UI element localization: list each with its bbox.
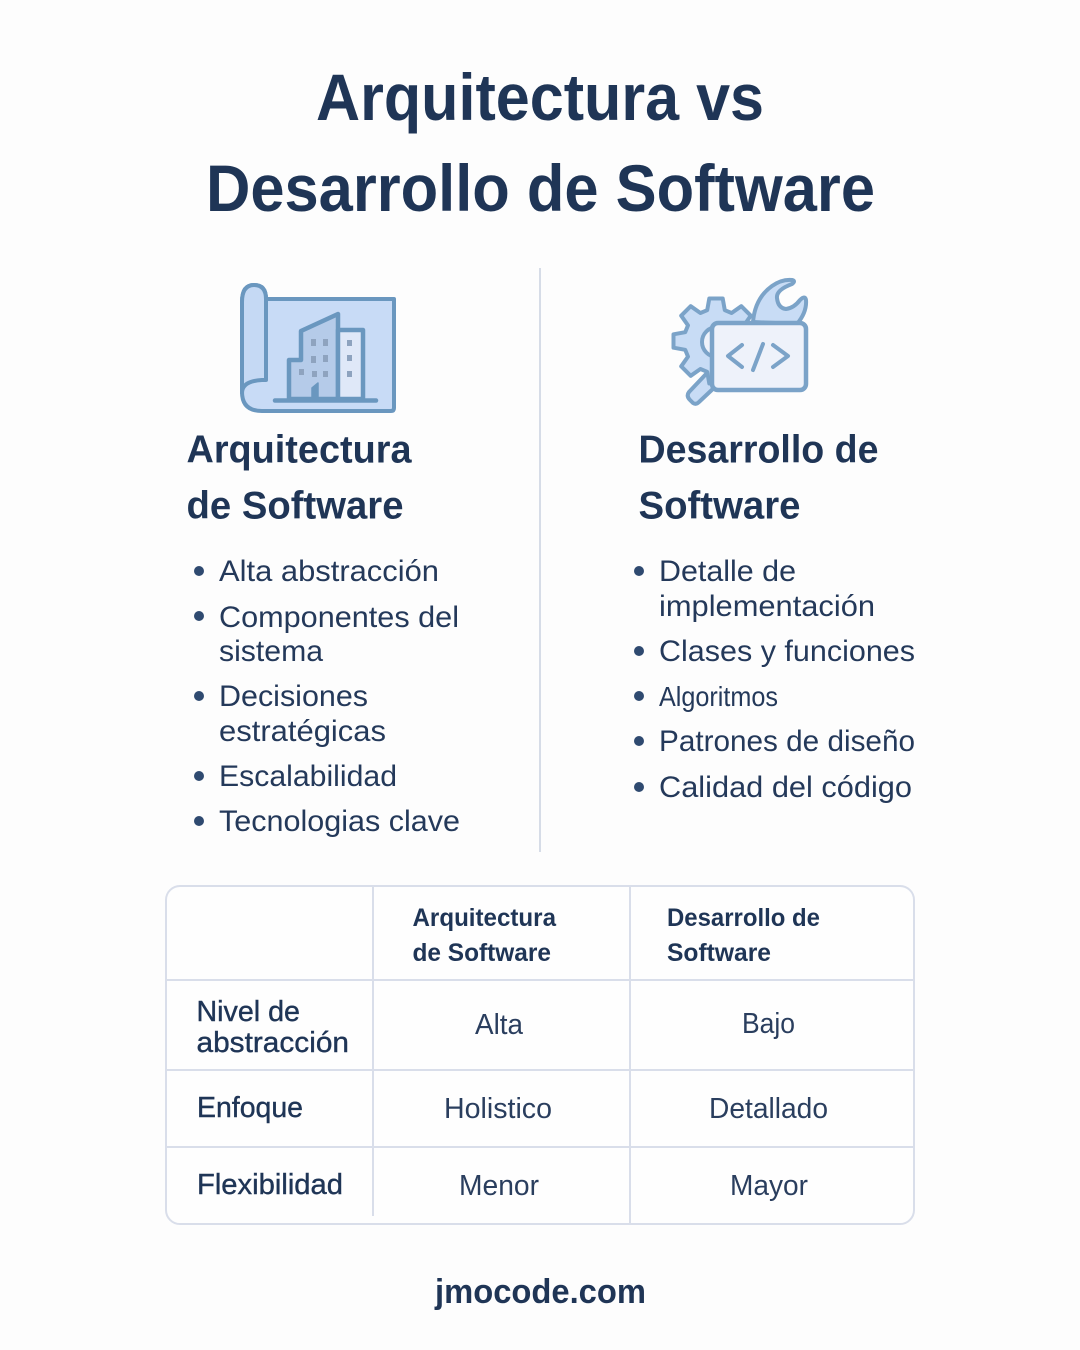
bullet list: arquitectura: Decisiones bbox=[219, 680, 368, 713]
row: nivel de abstracción bbox=[196, 996, 795, 1059]
bullet list: desarrollo: Patrones de diseño bbox=[659, 725, 915, 758]
bullet list: arquitectura: sistema bbox=[219, 635, 323, 668]
title bbox=[206, 60, 875, 225]
row: enfoque: Enfoque bbox=[197, 1092, 303, 1124]
title: Arquitectura vs bbox=[316, 60, 764, 134]
table header: de Software bbox=[412, 939, 551, 967]
heading: arquitectura de software bbox=[186, 428, 412, 528]
bullet list: desarrollo bbox=[634, 555, 915, 804]
row: nivel de abstracción: Alta bbox=[475, 1009, 523, 1041]
heading: desarrollo de software: Software bbox=[638, 484, 800, 528]
bullet list: arquitectura bbox=[194, 555, 460, 838]
panel: desarrollo de software bbox=[634, 280, 915, 804]
bullet list: desarrollo: Algoritmos bbox=[659, 681, 778, 712]
table header: Software bbox=[667, 939, 771, 967]
heading: desarrollo de software: Desarrollo de bbox=[638, 428, 878, 472]
footer: site name: jmocode.com bbox=[434, 1273, 646, 1311]
comparison table bbox=[166, 886, 914, 1224]
row: nivel de abstracción: Bajo bbox=[742, 1008, 795, 1040]
row: flexibilidad: Mayor bbox=[730, 1170, 808, 1202]
heading: desarrollo de software bbox=[638, 428, 878, 528]
row: enfoque bbox=[197, 1092, 828, 1125]
bullet list: arquitectura: Tecnologias clave bbox=[219, 805, 460, 838]
bullet list: desarrollo: Clases y funciones bbox=[659, 635, 915, 668]
icon: blueprint with building bbox=[242, 285, 394, 411]
row: enfoque: Detallado bbox=[709, 1093, 828, 1125]
bullet list: desarrollo: Detalle de bbox=[659, 555, 796, 588]
bullet list: arquitectura: Alta abstracción bbox=[219, 555, 439, 588]
title: Desarrollo de Software bbox=[206, 151, 875, 225]
row: flexibilidad: Flexibilidad bbox=[197, 1169, 343, 1201]
heading: arquitectura de software: Arquitectura bbox=[186, 428, 412, 472]
row: nivel de abstracción: Nivel de bbox=[196, 996, 300, 1028]
table header: Desarrollo de bbox=[667, 904, 820, 932]
table header bbox=[412, 904, 820, 967]
bullet list: arquitectura: estratégicas bbox=[219, 715, 386, 748]
icon: gear, wrench and code card bbox=[674, 280, 806, 404]
heading: arquitectura de software: de Software bbox=[186, 484, 404, 528]
bullet list: arquitectura: Componentes del bbox=[219, 601, 459, 634]
bullet list: desarrollo: implementación bbox=[659, 590, 875, 623]
table header: Arquitectura bbox=[412, 904, 557, 932]
row: nivel de abstracción: abstracción bbox=[196, 1027, 349, 1059]
bullet list: arquitectura: Escalabilidad bbox=[219, 760, 397, 793]
row: flexibilidad: Menor bbox=[459, 1170, 539, 1202]
panel: arquitectura de software bbox=[186, 285, 460, 838]
row: flexibilidad bbox=[197, 1169, 808, 1202]
row: enfoque: Holistico bbox=[444, 1093, 552, 1125]
bullet list: desarrollo: Calidad del código bbox=[659, 771, 912, 804]
